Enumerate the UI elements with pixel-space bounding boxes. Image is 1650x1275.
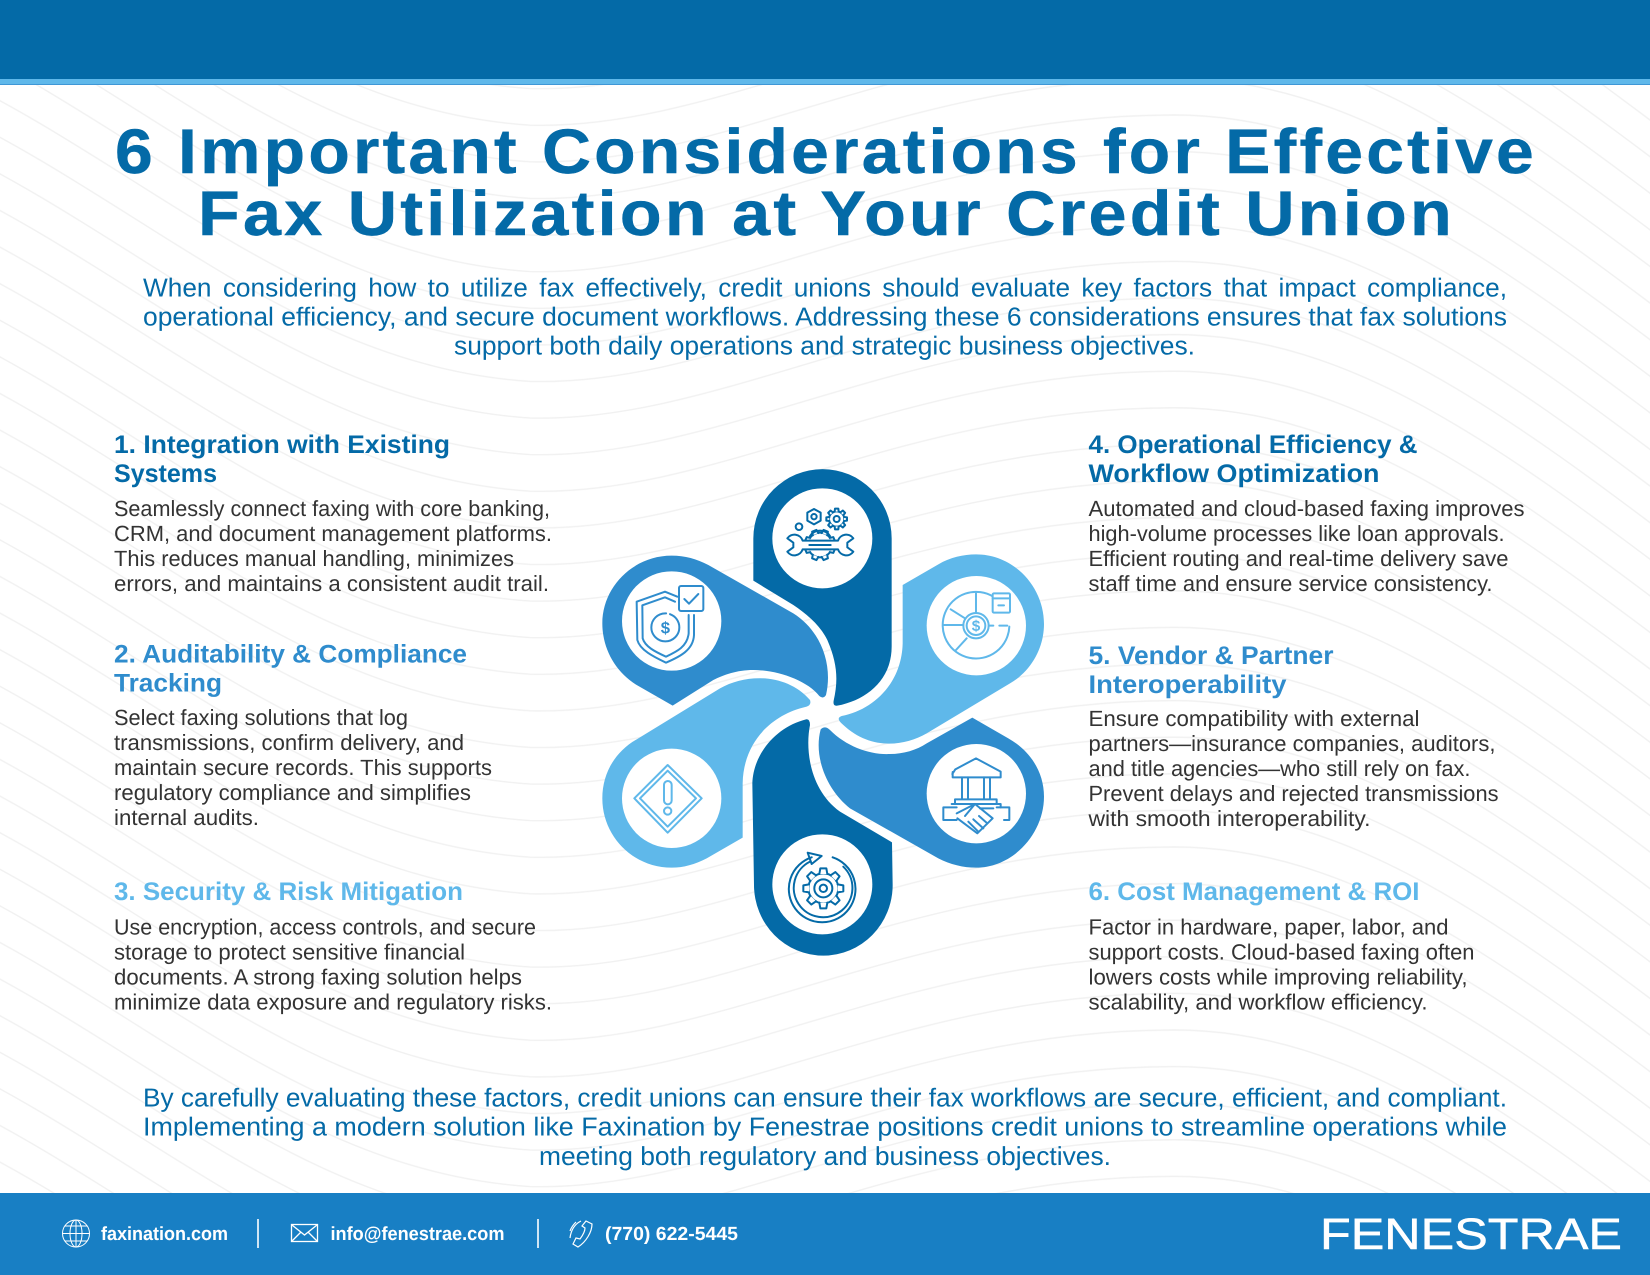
section 5: interoperability: with smooth interoperability. (1087, 806, 1370, 831)
section 5: interoperability: Interoperability (1088, 671, 1287, 699)
section 5: interoperability: Ensure compatibility with external (1088, 706, 1420, 731)
section 2: auditability: Tracking (114, 670, 222, 698)
section 6: cost (1088, 878, 1474, 1014)
icon: envelope (292, 1224, 318, 1242)
section 4: efficiency: high-volume processes like loan approvals. (1088, 521, 1504, 546)
closing paragraph (143, 1082, 1507, 1171)
section 4: efficiency: staff time and ensure service consistency. (1088, 571, 1492, 596)
footer band (0, 1193, 1650, 1275)
petal: bottom dark (752, 719, 893, 956)
icon: dollar pie chart (943, 592, 1010, 658)
section 6: cost: lowers costs while improving reliability, (1088, 964, 1468, 990)
section 1: integration: CRM, and document management platforms. (114, 521, 552, 546)
petal: bottom right mid (819, 718, 1044, 868)
section 1: integration (114, 431, 552, 596)
section 2: auditability: maintain secure records. This supports (114, 755, 492, 780)
intro paragraph (143, 272, 1507, 360)
petal: top dark (753, 469, 892, 706)
intro paragraph: When considering how to utilize fax effectively, credit unions should evaluate key factors that impact compliance, (143, 272, 1507, 302)
icon: warning diamond (634, 765, 702, 833)
petal: bottom left light (602, 678, 810, 868)
section 3: security: 3. Security & Risk Mitigation (114, 878, 463, 906)
petal: top left mid (602, 556, 828, 706)
closing paragraph: Implementing a modern solution like Faxination by Fenestrae positions credit unions to streamline operations while (143, 1112, 1507, 1142)
section 2: auditability: regulatory compliance and simplifies (114, 780, 471, 805)
icon: bank and handshake (943, 758, 1009, 833)
closing paragraph: By carefully evaluating these factors, credit unions can ensure their fax workflows are secure, efficient, and compliant. (143, 1082, 1507, 1112)
email: info@fenestrae.com (330, 1224, 504, 1245)
section 3: security: storage to protect sensitive financial (114, 940, 465, 964)
section 6: cost: Factor in hardware, paper, labor, and (1088, 914, 1448, 940)
icon: phone (570, 1221, 592, 1247)
section 5: interoperability: 5. Vendor & Partner (1088, 642, 1334, 670)
website: faxination.com (101, 1224, 228, 1245)
title (115, 117, 1537, 249)
section 6: cost: 6. Cost Management & ROI (1088, 878, 1420, 906)
closing paragraph: meeting both regulatory and business objectives. (539, 1141, 1111, 1171)
title: 6 Important Considerations for Effective (115, 117, 1537, 187)
section 4: efficiency: Workflow Optimization (1088, 460, 1380, 488)
section 6: cost: support costs. Cloud-based faxing often (1088, 940, 1474, 964)
section 3: security (114, 878, 552, 1014)
icon: gears and wrench (787, 509, 853, 560)
intro paragraph: operational efficiency, and secure document workflows. Addressing these 6 considerations ensures that fax solutions (143, 302, 1507, 332)
icon: shield with dollar and check: $ (661, 618, 670, 637)
title: Fax Utilization at Your Credit Union (198, 179, 1455, 249)
icon: dollar pie chart: $ (972, 617, 980, 634)
section 2: auditability (114, 641, 492, 830)
section 2: auditability: Select faxing solutions that log (114, 705, 408, 730)
header band (0, 0, 1650, 85)
intro paragraph: support both daily operations and strategic business objectives. (454, 330, 1195, 360)
icon: globe (62, 1220, 90, 1247)
logo wordmark: FENESTRAE (1320, 1210, 1622, 1259)
section 2: auditability: transmissions, confirm delivery, and (114, 730, 464, 755)
section 1: integration: 1. Integration with Existing (114, 431, 450, 459)
section 3: security: minimize data exposure and regulatory risks. (114, 990, 552, 1014)
section 4: efficiency: Automated and cloud-based faxing improves (1088, 496, 1524, 521)
icon: shield with dollar and check (637, 586, 703, 663)
section 1: integration: This reduces manual handling, minimizes (114, 546, 514, 571)
section 4: efficiency (1088, 431, 1524, 596)
section 4: efficiency: 4. Operational Efficiency & (1088, 431, 1418, 459)
pinwheel diagram (602, 469, 1044, 956)
section 1: integration: Seamlessly connect faxing with core banking, (114, 496, 550, 521)
section 1: integration: Systems (114, 460, 217, 488)
section 2: auditability: internal audits. (114, 805, 259, 830)
section 5: interoperability: Prevent delays and rejected transmissions (1088, 781, 1498, 806)
section 3: security: Use encryption, access controls, and secure (114, 914, 536, 940)
icon: gear with circular arrow (789, 853, 855, 922)
section 3: security: documents. A strong faxing solution helps (114, 964, 522, 990)
section 5: interoperability: partners—insurance companies, auditors, (1088, 731, 1496, 756)
section 2: auditability: 2. Auditability & Compliance (114, 641, 467, 669)
section 6: cost: scalability, and workflow efficiency. (1088, 990, 1428, 1014)
section 5: interoperability (1087, 642, 1498, 831)
section 5: interoperability: and title agencies—who still rely on fax. (1088, 756, 1470, 781)
petal: top right light (839, 554, 1044, 744)
phone number: (770) 622-5445 (605, 1224, 738, 1245)
section 1: integration: errors, and maintains a consistent audit trail. (114, 571, 549, 596)
section 4: efficiency: Efficient routing and real-time delivery save (1088, 546, 1508, 571)
